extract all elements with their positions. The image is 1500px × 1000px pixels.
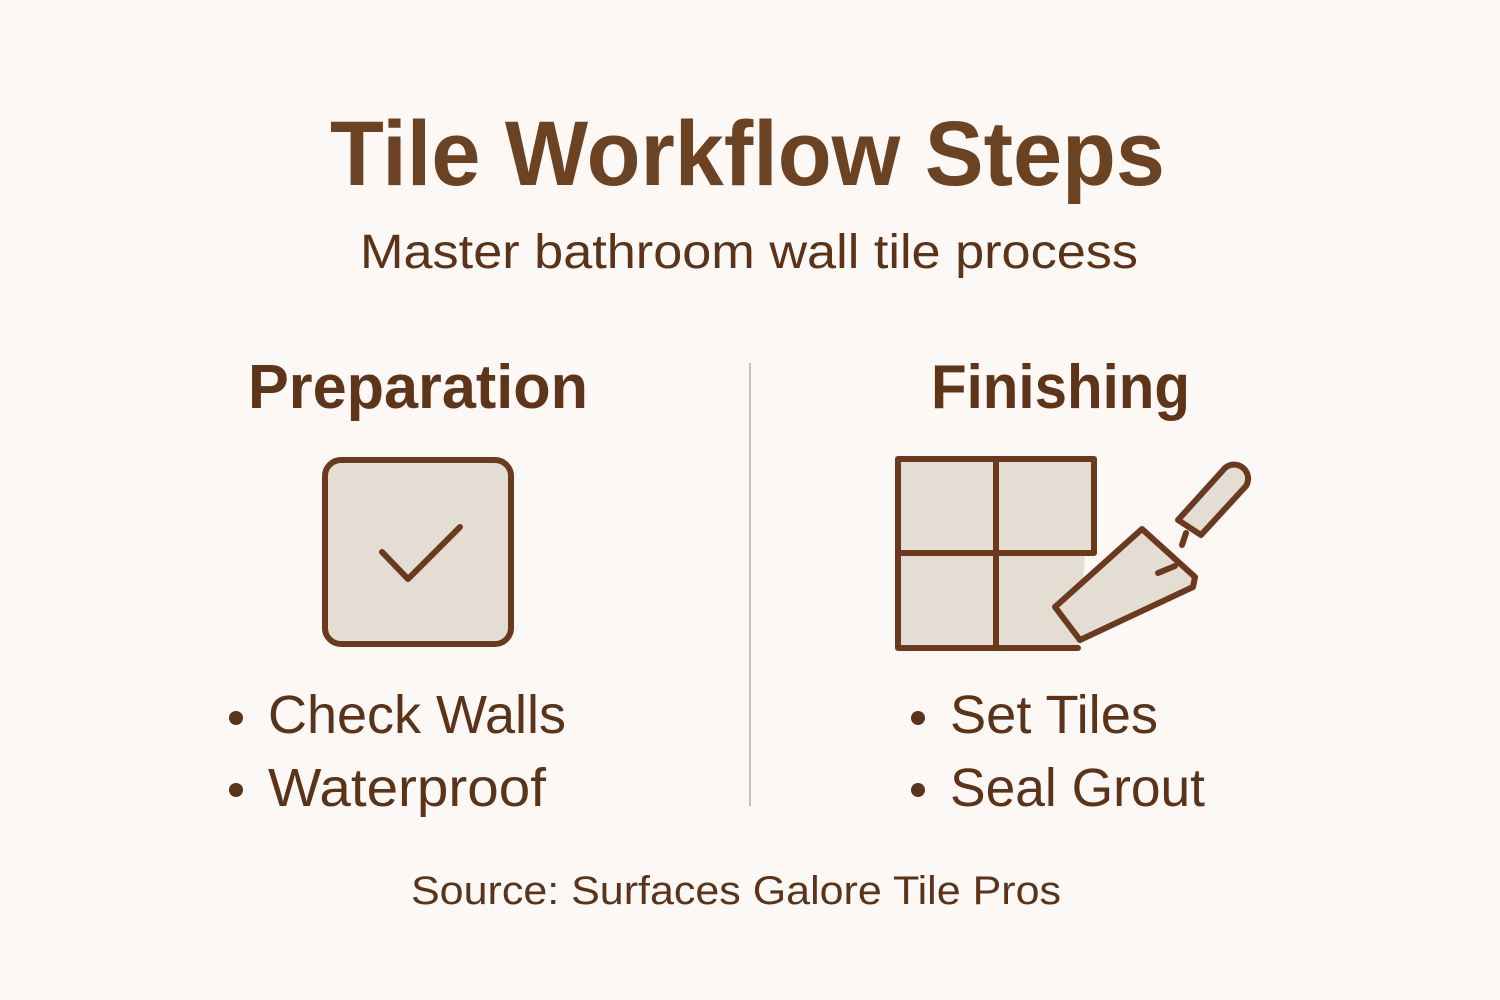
- source note: Source: Surfaces Galore Tile Pros: [411, 869, 1061, 913]
- title: Tile Workflow Steps: [330, 103, 1165, 205]
- bullet list: preparation: Waterproof: [268, 758, 547, 818]
- panel: preparation: [229, 353, 588, 818]
- bullet list: preparation: Check Walls: [268, 685, 566, 745]
- icon: tiles and trowel: [898, 459, 1248, 648]
- icon: checkbox: [325, 460, 511, 644]
- bullet list: finishing: [911, 685, 1205, 818]
- bullet list: finishing: Set Tiles: [950, 685, 1158, 745]
- heading: Preparation: Preparation: [248, 353, 588, 422]
- subtitle: Master bathroom wall tile process: [360, 226, 1138, 279]
- panel: finishing: [898, 353, 1248, 818]
- heading: Finishing: Finishing: [931, 353, 1190, 422]
- bullet list: preparation: [229, 685, 566, 818]
- divider: [749, 363, 751, 806]
- bullet list: finishing: Seal Grout: [950, 758, 1205, 818]
